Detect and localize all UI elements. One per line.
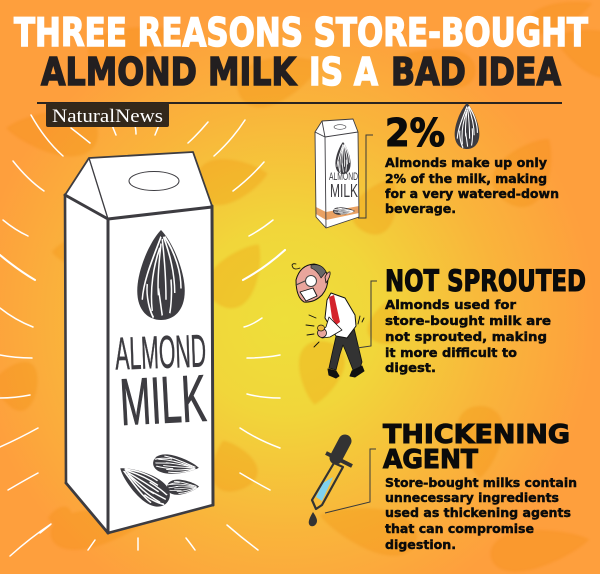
- arm and hand: [319, 317, 342, 338]
- text: thickening agent description: Store-bought milks contain: [385, 475, 577, 490]
- text: 2% description: [385, 155, 559, 216]
- hair curl: [292, 264, 300, 269]
- pain marks: [306, 315, 364, 347]
- text: thickening agent description: used as thickening agents: [385, 505, 571, 520]
- bracket: thickening agent: [325, 449, 376, 513]
- heading: 2%: 2%: [385, 111, 445, 155]
- text: ALMOND: [114, 324, 207, 380]
- text: not sprouted description: store-bought milk are: [385, 313, 551, 328]
- sun rays around carton: [0, 115, 285, 556]
- almond icon on carton: [137, 230, 185, 320]
- shoes: [328, 366, 364, 378]
- text: not sprouted description: not sprouted, making: [385, 329, 547, 344]
- glasses: [306, 276, 316, 286]
- text: thickening agent description: digestion.: [385, 537, 456, 552]
- small carton icon: MILK: [330, 181, 358, 201]
- text: thickening agent description: [385, 475, 577, 552]
- head: [296, 264, 328, 302]
- shirt: [325, 293, 356, 338]
- almonds on carton: [113, 453, 200, 513]
- text: 2% description: for a very watered-down: [385, 186, 559, 201]
- mouth: [300, 288, 317, 301]
- title: BAD IDEA: [391, 50, 561, 94]
- title: IS A: [309, 50, 378, 94]
- icon: almond: [455, 103, 479, 149]
- title: [14, 11, 588, 94]
- logo: NaturalNews: NaturalNews: [52, 106, 163, 127]
- carton label: MILK: [118, 361, 208, 439]
- text: not sprouted description: [385, 297, 551, 375]
- text: thickening agent description: that can compromise: [385, 521, 534, 536]
- heading: thickening agent: AGENT: [383, 445, 478, 475]
- text: 2% description: 2% of the milk, making: [385, 171, 547, 186]
- title: ALMOND MILK: [41, 50, 297, 94]
- small carton icon: [315, 119, 359, 228]
- heading: thickening agent: THICKENING: [383, 420, 570, 450]
- tie: [329, 295, 340, 325]
- legs: [329, 328, 362, 370]
- large almond milk carton: [65, 152, 213, 533]
- bracket: not sprouted: [357, 281, 377, 348]
- carton label: [114, 324, 208, 439]
- text: 2% description: Almonds make up only: [385, 155, 547, 170]
- icon: dropper: [309, 441, 352, 526]
- heading: thickening agent: [383, 420, 570, 475]
- text: not sprouted description: digest.: [385, 360, 436, 375]
- illustration: man with stomach ache: [292, 264, 364, 378]
- small carton icon: ALMOND: [329, 171, 358, 183]
- text: not sprouted description: Almonds used for: [385, 297, 517, 312]
- text: 2% description: beverage.: [385, 201, 456, 216]
- text: not sprouted description: it more difficult to: [385, 345, 517, 360]
- bracket: 2%: [358, 135, 373, 218]
- text: thickening agent description: unnecessary ingredients: [385, 490, 559, 505]
